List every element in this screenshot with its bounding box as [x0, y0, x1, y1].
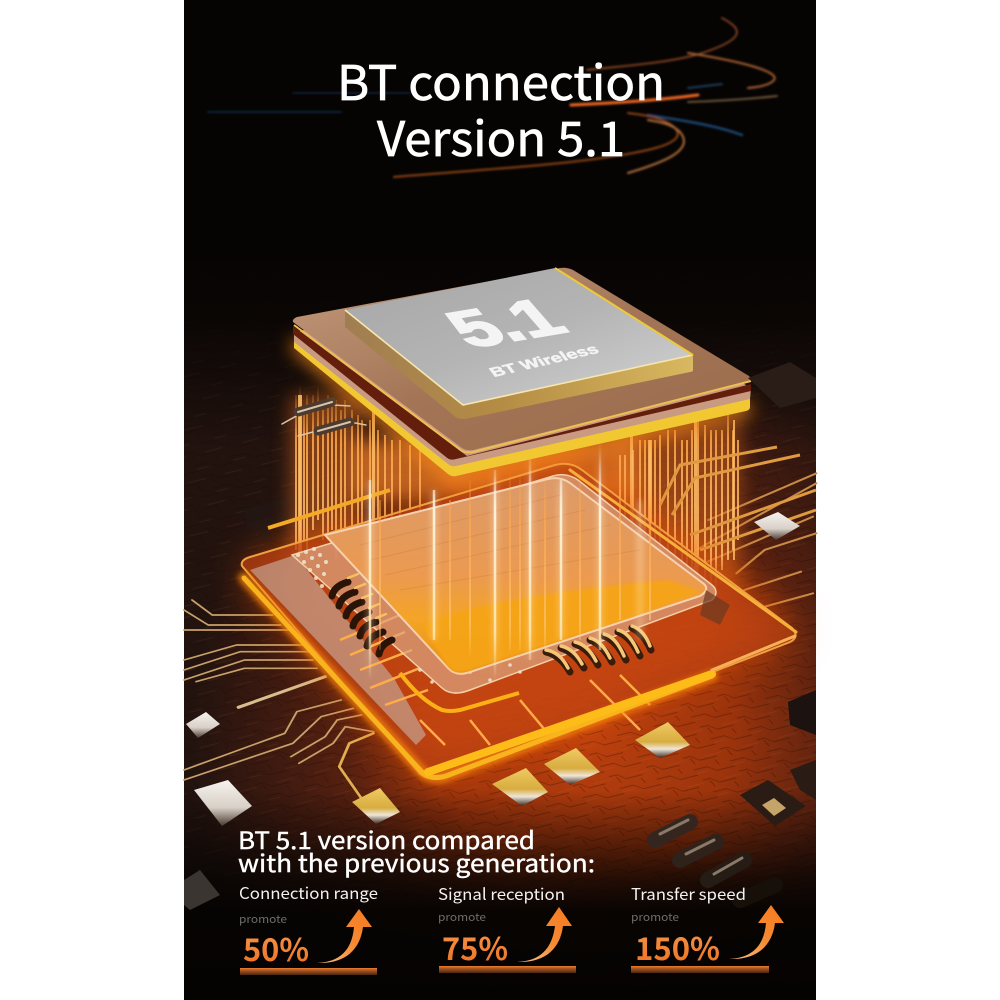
board components [184, 362, 816, 910]
chip label BT Wireless: BT Wireless [486, 341, 602, 380]
component: small IC right [748, 362, 816, 408]
lower chip glow [242, 462, 797, 778]
glass base plate [242, 464, 796, 779]
panel: dark poster background [184, 0, 816, 1000]
component: right cubes [740, 760, 816, 826]
component: dark block right [788, 690, 816, 735]
glowing yellow rim [244, 470, 796, 778]
comparison heading: BT 5.1 version compared [238, 821, 535, 856]
component: dark IC left [244, 490, 345, 542]
traces glowing behind beams [660, 447, 816, 550]
stat: connection range: 50% [243, 925, 309, 970]
translucent left strip [250, 555, 426, 745]
stat: transfer speed: promote [631, 909, 679, 925]
gold circuit traces on board [184, 473, 816, 798]
yellow pool in die [422, 580, 700, 672]
comparison heading [238, 821, 595, 879]
component: yellow pad [352, 788, 400, 824]
energy beams backdrop [268, 385, 816, 600]
component: gold cube top [762, 798, 786, 816]
bottom coil [546, 626, 651, 672]
silver chip top [345, 268, 693, 405]
component: gold pad 1 [635, 722, 690, 758]
component: capacitors [655, 820, 775, 900]
right corner pad [700, 590, 730, 625]
stat: transfer speed: 150% [635, 924, 720, 969]
inner tray [292, 475, 716, 693]
silver chip side [345, 310, 693, 419]
stat: signal reception: Signal reception [438, 881, 565, 905]
stat: signal reception: 75% [442, 924, 508, 969]
component: white pad left [186, 712, 220, 738]
stat: transfer speed [631, 881, 784, 973]
chip edge yellow [555, 268, 693, 355]
glowing orange die [325, 478, 706, 674]
tan middle layer [294, 278, 751, 466]
icon: up arrow [317, 909, 372, 963]
resistors left of chip [282, 402, 366, 436]
under-glass traces [340, 615, 650, 745]
light beams over chip [370, 440, 650, 680]
component: gray block left [184, 870, 220, 910]
glow under chip [294, 342, 750, 478]
stat: connection range: promote [239, 911, 287, 927]
yellow base layer [294, 285, 750, 476]
stat: signal reception [438, 881, 576, 973]
stat: transfer speed: Transfer speed [631, 881, 746, 905]
dotted contact pads [296, 547, 522, 684]
component: gold pad 3 [492, 768, 548, 806]
stat: connection range [239, 880, 378, 975]
dark red gap [293, 326, 751, 460]
title: Version 5.1 [377, 100, 625, 170]
lower glass chip [242, 464, 796, 779]
circuit board background [184, 260, 816, 1000]
upper floating chip [293, 268, 751, 478]
left coil [332, 574, 392, 654]
icon: up arrow [517, 907, 572, 962]
inner yellow bracket [400, 673, 519, 711]
component: gold pad 2 [544, 748, 600, 785]
stat: connection range: Connection range [239, 880, 378, 904]
icon: up arrow [729, 905, 784, 959]
comparison heading: with the previous generation: [238, 844, 595, 879]
chip edge highlights [345, 310, 693, 405]
scan lines on die [360, 495, 640, 590]
underline [240, 968, 377, 975]
stat: signal reception: promote [438, 909, 486, 925]
component: white block lower left [194, 780, 252, 826]
underline [439, 966, 576, 973]
underline [631, 966, 769, 973]
light streaks behind title [208, 18, 777, 177]
title: BT connection [337, 44, 665, 114]
component: white pad right [754, 512, 800, 540]
copper top plate [293, 268, 751, 450]
chip label 5.1: 5.1 [432, 288, 579, 359]
title [337, 44, 665, 170]
copper plate gold edge [294, 325, 751, 452]
